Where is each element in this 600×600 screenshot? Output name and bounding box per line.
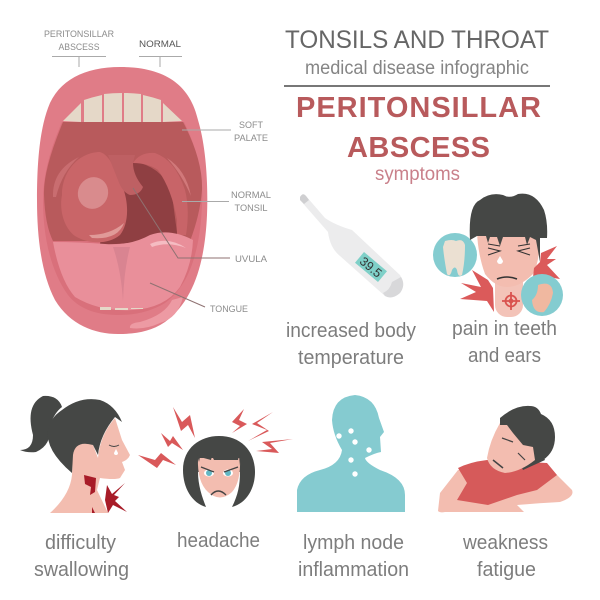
caption: weakness fatigue xyxy=(462,532,548,581)
caption: pain in teeth and ears: and ears xyxy=(468,345,541,367)
caption: weakness fatigue: fatigue xyxy=(477,559,536,581)
icon: throat target xyxy=(502,292,520,310)
label: soft palate: SOFT xyxy=(239,120,263,131)
label: normal xyxy=(139,39,182,67)
burst: jaw pain xyxy=(460,270,494,312)
title: medical disease infographic xyxy=(305,58,529,79)
label: uvula: UVULA xyxy=(235,254,268,265)
caption: lymph node inflammation: inflammation xyxy=(298,559,409,581)
tongue xyxy=(53,232,193,310)
back of throat xyxy=(100,163,178,245)
caption: headache: headache xyxy=(177,530,260,552)
right arch xyxy=(133,153,188,235)
caption: difficulty swallowing: swallowing xyxy=(34,559,129,581)
abscess tonsil xyxy=(61,152,127,242)
throat xyxy=(44,122,202,241)
icon: thermometer xyxy=(300,194,403,297)
heading: disease name: PERITONSILLAR xyxy=(296,92,541,124)
icon: woman in profile with throat pain xyxy=(20,396,130,513)
label: soft palate xyxy=(182,120,268,144)
caption: weakness fatigue: weakness xyxy=(462,532,548,554)
label: soft palate: PALATE xyxy=(234,133,268,144)
left arch xyxy=(53,157,79,197)
title xyxy=(284,26,550,87)
label: peritonsillar abscess xyxy=(44,29,114,67)
icon: tired person resting head xyxy=(438,406,572,512)
caption: lymph node inflammation: lymph node xyxy=(303,532,404,554)
caption: increased body temperature xyxy=(286,320,416,369)
icon: face with tooth and ear pain xyxy=(433,194,563,317)
label: normal: NORMAL xyxy=(139,39,181,50)
label: uvula xyxy=(133,188,268,265)
label: peritonsillar abscess: ABSCESS xyxy=(58,42,100,53)
label: normal tonsil: TONSIL xyxy=(234,203,268,214)
label: tongue xyxy=(150,283,248,315)
heading: disease name xyxy=(296,92,541,164)
title: TONSILS AND THROAT xyxy=(285,26,549,54)
caption: difficulty swallowing: difficulty xyxy=(45,532,116,554)
heading: disease name: ABSCESS xyxy=(347,132,490,164)
caption: lymph node inflammation xyxy=(298,532,409,581)
caption: difficulty swallowing xyxy=(34,532,129,581)
uvula xyxy=(108,155,143,195)
caption: increased body temperature: increased body xyxy=(286,320,416,342)
lip highlight xyxy=(130,297,183,328)
label: tongue: TONGUE xyxy=(210,304,248,315)
icon: headache face with lightning xyxy=(138,407,293,507)
caption: increased body temperature: temperature xyxy=(298,347,404,369)
label: peritonsillar abscess: PERITONSILLAR xyxy=(44,29,114,40)
label: normal tonsil: NORMAL xyxy=(231,190,271,201)
teeth xyxy=(63,93,182,122)
lightning bolts xyxy=(138,407,293,468)
icon: lymph node silhouette xyxy=(297,395,405,512)
caption: pain in teeth and ears xyxy=(452,318,557,367)
burst: ear pain xyxy=(532,246,560,287)
caption: pain in teeth and ears: pain in teeth xyxy=(452,318,557,340)
icon: thermometer: 39.5 xyxy=(357,254,385,281)
label: normal tonsil xyxy=(182,190,271,214)
burst: throat pain xyxy=(84,475,127,513)
subheading: symptoms: symptoms xyxy=(375,164,460,185)
mouth diagram xyxy=(37,67,207,334)
